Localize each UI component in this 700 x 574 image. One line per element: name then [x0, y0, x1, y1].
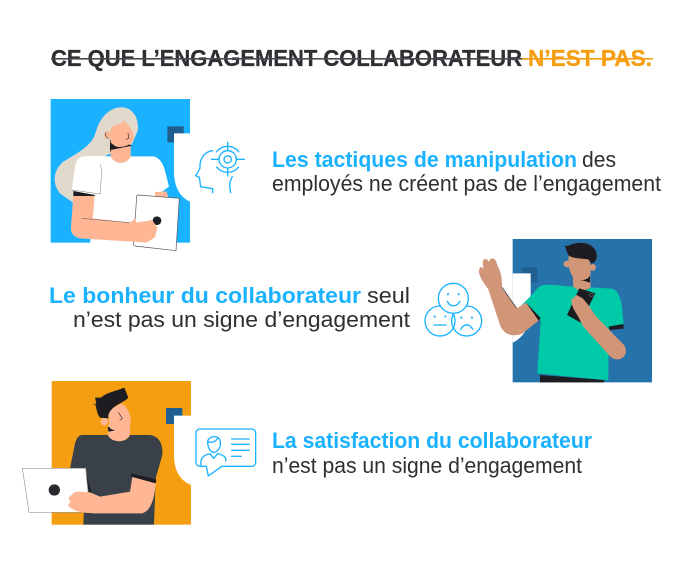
panel: man with tablet illustration: [22, 381, 256, 525]
text block: bonheur: [49, 283, 411, 332]
text block: bonheur: Le bonheur du collaborateur: [49, 283, 361, 308]
text block: manipulation: employés ne créent pas de l’engagement: [272, 171, 662, 196]
tablet: [133, 195, 179, 251]
icon: profile card with speech tail: [196, 429, 256, 476]
panel: man with phone illustration: [425, 239, 652, 382]
text block: bonheur: seul: [367, 283, 410, 308]
title: CE QUE L’ENGAGEMENT COLLABORATEUR: [51, 45, 522, 71]
phone: [567, 288, 595, 323]
text block: manipulation: [272, 147, 662, 196]
panel: woman illustration: [51, 99, 244, 251]
title: N’EST PAS.: [528, 45, 652, 71]
text block: manipulation: Les tactiques de manipulation: [272, 147, 577, 172]
tablet: [22, 468, 90, 512]
text block: satisfaction: n’est pas un signe d’engagement: [272, 453, 583, 478]
arm: raised: [479, 258, 539, 335]
text block: satisfaction: [272, 428, 592, 478]
text block: satisfaction: La satisfaction du collaborateur: [272, 428, 592, 453]
icon: three smileys: [425, 283, 482, 336]
text block: bonheur: n’est pas un signe d’engagement: [73, 307, 411, 332]
icon: head with target: [196, 142, 244, 193]
text block: manipulation: des: [582, 147, 616, 172]
